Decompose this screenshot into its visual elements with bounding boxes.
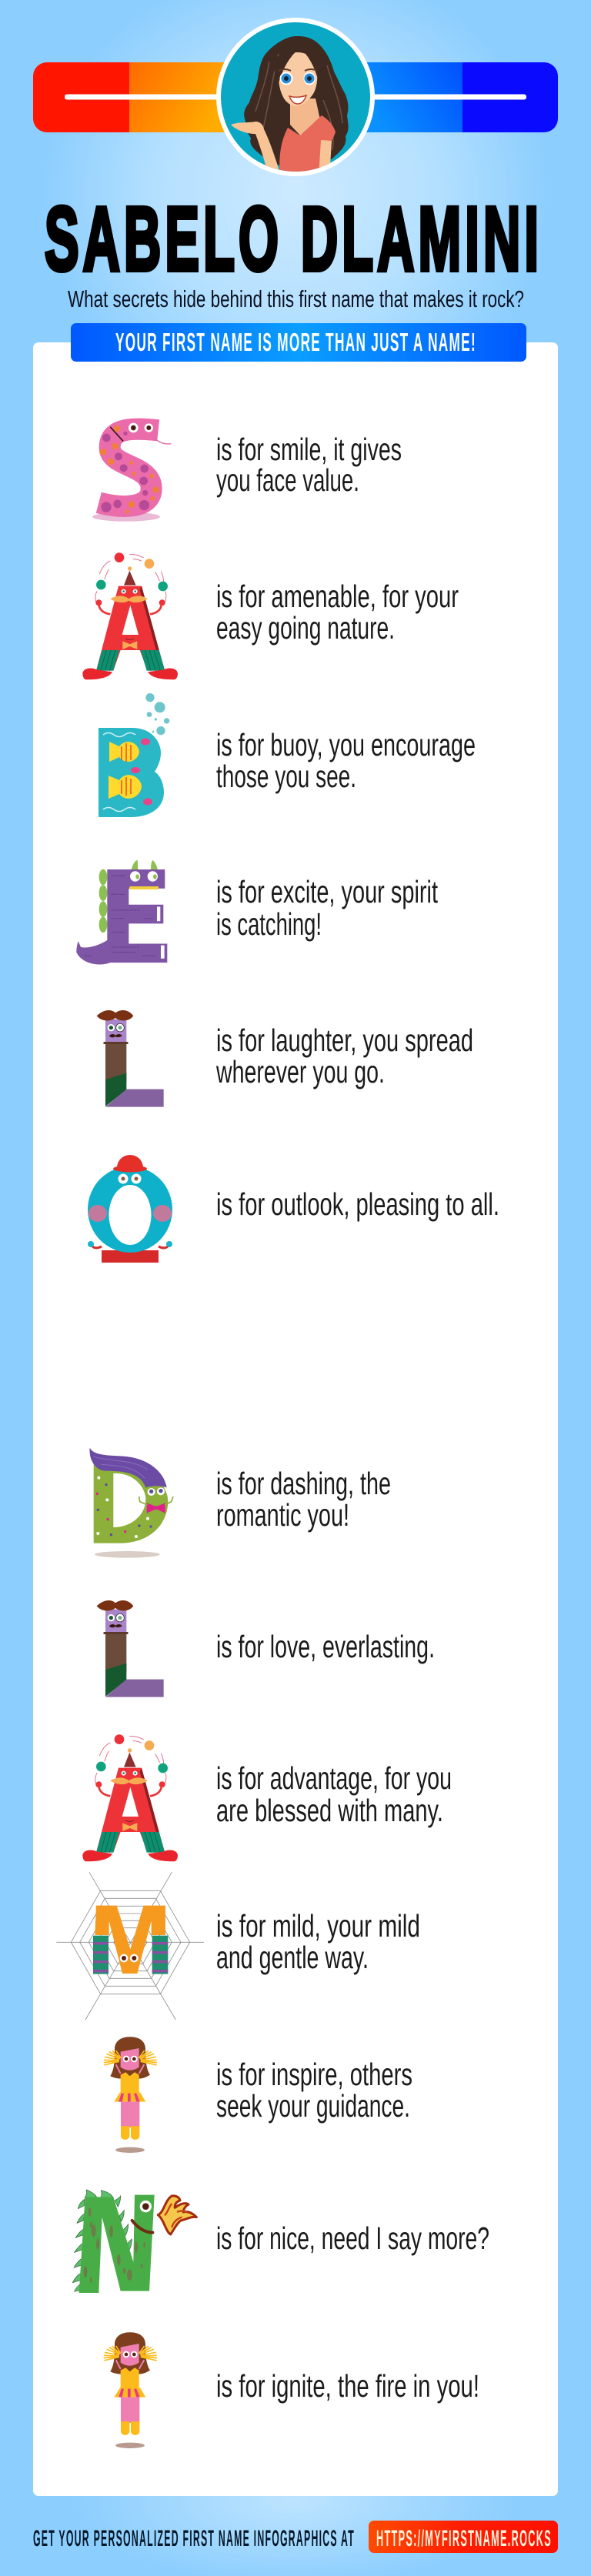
text: smile [216, 432, 402, 498]
avatar: cartoon woman in circle [216, 18, 375, 179]
text: ignite: is for ignite, the fire in you! [216, 2368, 479, 2404]
text: buoy: those you see. [216, 759, 356, 794]
icon: cheerleader letter I [104, 2332, 157, 2448]
white content panel [33, 342, 558, 2496]
row: E [76, 860, 438, 965]
icon: fish tank letter B [98, 693, 169, 817]
text: amenable: is for amenable, for your [216, 579, 459, 614]
row: O [88, 1155, 499, 1263]
row: S [92, 423, 402, 522]
row: A (second) [82, 1734, 452, 1861]
icon: snake letter S [92, 423, 171, 522]
row: L (second) [97, 1600, 435, 1697]
text: buoy: is for buoy, you encourage [216, 727, 476, 762]
banner [71, 323, 526, 362]
icon: green letter D with purple hair [90, 1448, 173, 1558]
icon: dragon letter N with flame [72, 2190, 196, 2293]
text: excite: is for excite, your spirit [216, 874, 438, 909]
row: L [97, 1010, 473, 1107]
text: dashing: romantic you! [216, 1497, 349, 1533]
text: advantage [216, 1760, 452, 1828]
text: laughter [215, 1023, 473, 1089]
text: buoy [216, 727, 476, 794]
icon: detective letter L [97, 1600, 164, 1697]
footer url button [369, 2521, 558, 2553]
icon: dragon letter E [76, 860, 167, 965]
text: amenable [216, 579, 459, 646]
row: D [90, 1448, 391, 1558]
text: dashing: is for dashing, the [216, 1466, 391, 1501]
text: inspire [216, 2057, 412, 2124]
row: I (second) [104, 2332, 479, 2448]
text: laughter: wherever you go. [215, 1054, 385, 1089]
row: I [104, 2037, 412, 2153]
text: excite [216, 874, 438, 942]
text: love: is for love, everlasting. [216, 1629, 435, 1664]
text: smile: is for smile, it gives [216, 432, 402, 467]
icon: round letter O with hat [88, 1155, 172, 1263]
icon: detective letter L [97, 1010, 164, 1107]
text: inspire: is for inspire, others [216, 2057, 412, 2092]
text: mild: and gentle way. [216, 1940, 369, 1975]
icon: cheerleader letter I [104, 2037, 157, 2153]
icon: clown letter A [82, 1734, 178, 1861]
text: amenable: easy going nature. [216, 610, 395, 646]
row: N [72, 2190, 489, 2293]
row: M [56, 1872, 420, 2020]
icon: clown letter A [82, 552, 178, 679]
text: mild: is for mild, your mild [216, 1908, 420, 1944]
text: inspire: seek your guidance. [216, 2088, 410, 2124]
row: B [98, 693, 476, 817]
text: laughter: is for laughter, you spread [216, 1023, 473, 1058]
text: smile: you face value. [216, 462, 359, 498]
header colour bar [33, 62, 558, 132]
text: mild [216, 1908, 420, 1975]
icon: spider web letter M [56, 1872, 204, 2020]
text: dashing [216, 1466, 391, 1533]
text: advantage: is for advantage, for you [216, 1760, 452, 1796]
text: excite: is catching! [216, 906, 322, 942]
row: A [82, 552, 459, 679]
text: advantage: are blessed with many. [216, 1793, 443, 1828]
